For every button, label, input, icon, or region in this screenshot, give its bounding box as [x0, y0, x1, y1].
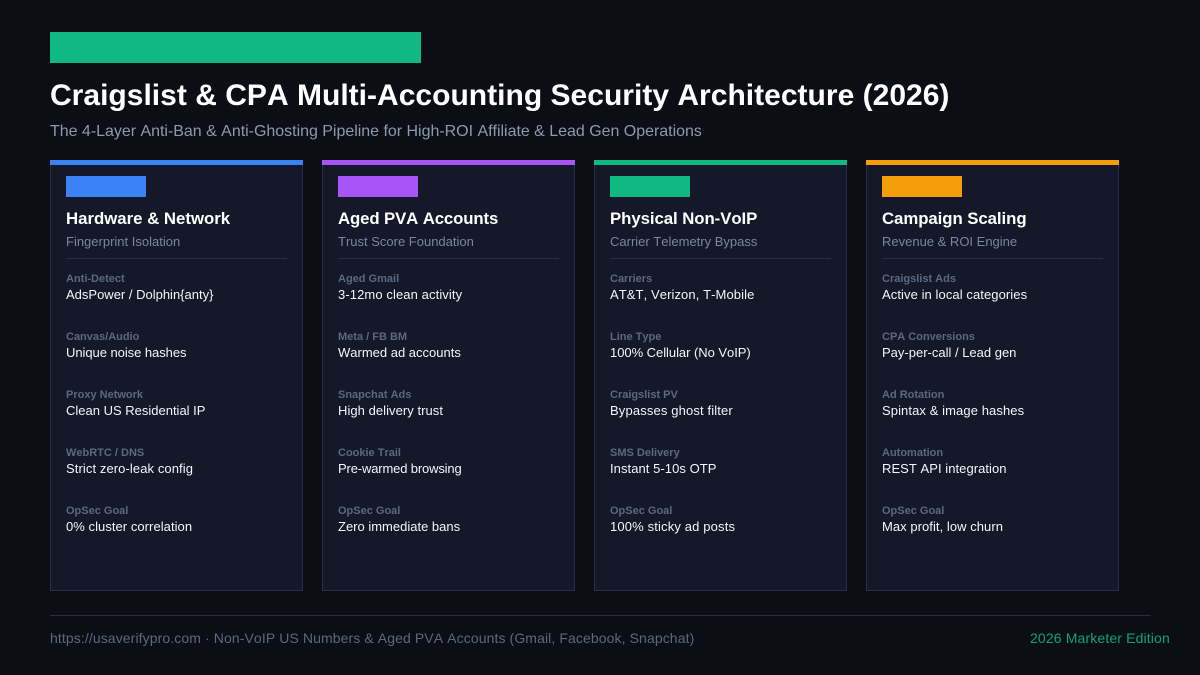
- row: Automation: [882, 447, 1007, 476]
- panel: Campaign Scaling: Revenue & ROI Engine: [882, 234, 1017, 249]
- row: CPA Conversions: CPA Conversions: [882, 331, 975, 343]
- footer edition label: 2026 Marketer Edition: [1030, 630, 1170, 646]
- row: Cookie Trail: [338, 447, 462, 476]
- panel: Aged PVA Accounts: Aged PVA Accounts: [338, 209, 498, 228]
- row: Canvas/Audio: [66, 331, 186, 360]
- row: Craigslist Ads: [882, 273, 1027, 302]
- panel: Physical Non-VoIP: [594, 160, 847, 591]
- row: Anti-Detect: AdsPower / Dolphin{anty}: [66, 287, 213, 302]
- row: Carriers: Carriers: [610, 273, 652, 285]
- row: Carriers: AT&T, Verizon, T-Mobile: [610, 287, 754, 302]
- row: WebRTC / DNS: WebRTC / DNS: [66, 447, 144, 459]
- row: Cookie Trail: Cookie Trail: [338, 447, 401, 459]
- row: Automation: REST API integration: [882, 461, 1007, 476]
- row: Snapchat Ads: [338, 389, 443, 418]
- row: OpSec Goal: [882, 505, 1003, 534]
- row: Automation: Automation: [882, 447, 943, 459]
- row: Aged Gmail: Aged Gmail: [338, 273, 399, 285]
- row: Craigslist Ads: Craigslist Ads: [882, 273, 956, 285]
- row: OpSec Goal: Zero immediate bans: [338, 519, 460, 534]
- panel: Campaign Scaling: Campaign Scaling: [882, 209, 1027, 228]
- row: OpSec Goal: [610, 505, 735, 534]
- title: Craigslist & CPA Multi-Accounting Security Architecture (2026): [50, 79, 949, 112]
- row: Anti-Detect: [66, 273, 214, 302]
- row: Aged Gmail: 3-12mo clean activity: [338, 287, 462, 302]
- row: Carriers: [610, 273, 754, 302]
- row: Proxy Network: [66, 389, 205, 418]
- panel: Hardware & Network: Fingerprint Isolation: [66, 234, 180, 249]
- row: Meta / FB BM: Meta / FB BM: [338, 331, 407, 343]
- footer source text: https://usaverifypro.com · Non-VoIP US Numbers & Aged PVA Accounts (Gmail, Facebook, Snapchat): [50, 630, 694, 646]
- panel: Aged PVA Accounts: [322, 160, 575, 591]
- row: Cookie Trail: Pre-warmed browsing: [338, 461, 462, 476]
- row: Ad Rotation: Spintax & image hashes: [882, 403, 1024, 418]
- header accent bar: [50, 32, 421, 63]
- row: OpSec Goal: Max profit, low churn: [882, 519, 1003, 534]
- row: Canvas/Audio: Canvas/Audio: [66, 331, 139, 343]
- row: OpSec Goal: 0% cluster correlation: [66, 519, 192, 534]
- row: Proxy Network: Proxy Network: [66, 389, 143, 401]
- row: Craigslist PV: Bypasses ghost filter: [610, 403, 733, 418]
- row: WebRTC / DNS: Strict zero-leak config: [66, 461, 193, 476]
- row: Ad Rotation: Ad Rotation: [882, 389, 944, 401]
- subtitle: The 4-Layer Anti-Ban & Anti-Ghosting Pipeline for High-ROI Affiliate & Lead Gen Operations: [50, 123, 702, 140]
- row: Line Type: [610, 331, 751, 360]
- row: SMS Delivery: SMS Delivery: [610, 447, 680, 459]
- row: OpSec Goal: OpSec Goal: [610, 505, 672, 517]
- row: Meta / FB BM: Warmed ad accounts: [338, 345, 461, 360]
- row: OpSec Goal: OpSec Goal: [882, 505, 944, 517]
- row: Snapchat Ads: High delivery trust: [338, 403, 443, 418]
- row: OpSec Goal: OpSec Goal: [338, 505, 400, 517]
- panel: Hardware & Network: Hardware & Network: [66, 209, 230, 228]
- row: WebRTC / DNS: [66, 447, 193, 476]
- panel: Physical Non-VoIP: Carrier Telemetry Bypass: [610, 234, 757, 249]
- row: OpSec Goal: 100% sticky ad posts: [610, 519, 735, 534]
- row: Craigslist Ads: Active in local categories: [882, 287, 1027, 302]
- row: Craigslist PV: Craigslist PV: [610, 389, 678, 401]
- row: Line Type: Line Type: [610, 331, 661, 343]
- panel: Physical Non-VoIP: Physical Non-VoIP: [610, 209, 757, 228]
- row: Anti-Detect: Anti-Detect: [66, 273, 125, 285]
- row: Snapchat Ads: Snapchat Ads: [338, 389, 411, 401]
- row: Aged Gmail: [338, 273, 462, 302]
- row: CPA Conversions: Pay-per-call / Lead gen: [882, 345, 1016, 360]
- row: OpSec Goal: [338, 505, 460, 534]
- row: SMS Delivery: Instant 5-10s OTP: [610, 461, 717, 476]
- row: Ad Rotation: [882, 389, 1024, 418]
- row: Line Type: 100% Cellular (No VoIP): [610, 345, 751, 360]
- row: Meta / FB BM: [338, 331, 461, 360]
- row: OpSec Goal: [66, 505, 192, 534]
- row: Canvas/Audio: Unique noise hashes: [66, 345, 186, 360]
- panel: Hardware & Network: [50, 160, 303, 591]
- row: SMS Delivery: [610, 447, 717, 476]
- row: OpSec Goal: OpSec Goal: [66, 505, 128, 517]
- row: Craigslist PV: [610, 389, 733, 418]
- row: CPA Conversions: [882, 331, 1016, 360]
- row: Proxy Network: Clean US Residential IP: [66, 403, 205, 418]
- panel: Aged PVA Accounts: Trust Score Foundation: [338, 234, 474, 249]
- panel: Campaign Scaling: [866, 160, 1119, 591]
